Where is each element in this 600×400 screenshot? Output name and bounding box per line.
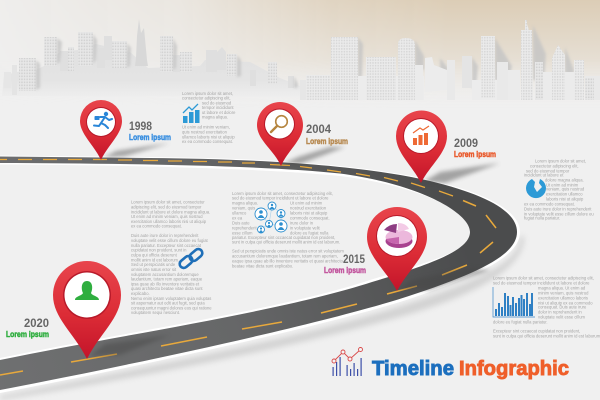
text block: left column: mollit anim id est laborum. [131, 258, 179, 262]
title: Infographic [459, 358, 569, 380]
text block: top: quis nostrud exercitation [182, 130, 228, 134]
text block: center: commodo consequat. [290, 216, 330, 220]
background [68, 0, 600, 84]
text block: center: sed do eiusmod tempor incididunt ut labore et dolore [232, 196, 329, 200]
text block: top: tempor incididunt [202, 105, 234, 110]
text block: right: Lorem ipsum dolor sit amet, [535, 158, 586, 164]
text block: left column: voluptatem sequi nesciunt. [131, 310, 180, 315]
icon: blue rising chart [183, 104, 200, 123]
text block: lower right: magna aliqua. Ut enim ad [538, 286, 586, 290]
text block: lower right: dolor in reprehenderit in [538, 310, 582, 314]
text block: center: irure dolor in [290, 220, 314, 226]
title [372, 358, 569, 380]
text block: center: eaque ipsa quae ab illo inventore veritatis et quasi architecto [232, 258, 344, 264]
text block: lower right: consequat. Duis aute irure [538, 304, 587, 310]
text block: center: magna aliqua. [232, 200, 258, 206]
skyline: left buildings [4, 19, 294, 95]
skyline: building shadows [36, 25, 574, 90]
icon: magnifier [271, 116, 287, 132]
bar chart [493, 287, 535, 317]
text block: top: ut labore et dolore [202, 110, 236, 115]
label: 2009 [454, 136, 496, 159]
text block: center: Duis aute [232, 220, 250, 226]
text block: top: Ut enim ad minim veniam, [182, 124, 230, 130]
text block: lower right: nisi ut aliquip ex ea commodo [538, 300, 593, 306]
skyline: left silhouette [2, 44, 300, 97]
label: 2009: 2009 [454, 136, 478, 150]
text block: center: reprehenderit [232, 226, 257, 230]
label: 2004: 2004 [306, 122, 331, 136]
text block: left column: adipiscing elit, sed do eiusmod tempor [131, 204, 202, 210]
text block: center: laboris nisi ut aliquip [290, 210, 328, 216]
label: 1998: Lorem ipsum [129, 132, 171, 142]
text block: lower right: exercitation ullamco laboris [538, 296, 588, 300]
label: 2015: Lorem ipsum [324, 265, 366, 275]
text block: center: nostrud exercitation [290, 206, 327, 210]
road: asphalt [0, 156, 517, 390]
text block: lower right: sed do eiusmod tempor incididunt ut labore et dolore [493, 280, 590, 286]
icon: orange bar chart [413, 126, 429, 145]
text block: lower right: Excepteur sint occaecat cupidatat non proident, [493, 328, 580, 334]
text block: right: veniam, quis nostrud [546, 186, 585, 192]
label: 2020: Lorem ipsum [6, 329, 49, 339]
icon: chain link [178, 247, 204, 270]
pin: 1998 [80, 100, 122, 160]
text block: center: dolore eu fugiat nulla [290, 230, 329, 236]
icon: purple pie [384, 223, 412, 248]
pin: 2020 [53, 261, 121, 359]
text block: top: Lorem ipsum dolor sit amet, [182, 91, 233, 96]
text block: top: sed do eiusmod [202, 100, 232, 106]
text block: center [232, 191, 344, 268]
text block: left column: ipsa quae ab illo inventore veritatis et [131, 282, 200, 286]
text block: left column: incididunt ut labore et dolore magna aliqua. [131, 210, 210, 214]
text block: lower right: Lorem ipsum dolor sit amet, consectetur adipiscing elit, [493, 276, 594, 280]
text block: left column: Lorem ipsum dolor sit amet, consectetur [131, 200, 205, 204]
text block: left column: Nemo enim ipsam voluptatem quia voluptas [131, 296, 211, 301]
title: Timeline [372, 358, 454, 380]
icon: blue pie [526, 179, 546, 198]
text block: left column: Sed ut perspiciatis unde [131, 262, 176, 267]
text block: left column: omnis iste natus error sit [131, 267, 177, 272]
text block: center: Ut enim ad minim [290, 200, 323, 206]
text block: top: ullamco laboris nisi ut aliquip [182, 134, 235, 140]
text block: center: ex ea [232, 216, 243, 220]
text block: left column: quasi architecto beatae vitae dicta sunt [131, 286, 203, 291]
road [0, 156, 520, 393]
label: 2020 [6, 316, 49, 339]
pin: 2004 [257, 102, 303, 166]
text block: right: consectetur adipiscing elit, [530, 164, 579, 168]
text block: lower right: dolore eu fugiat nulla pariatur. [493, 320, 548, 324]
icon: green person [75, 281, 99, 300]
text block: left column: culpa qui officia deserunt [131, 252, 178, 258]
label: 2009: Lorem ipsum [454, 149, 496, 159]
icon: runner [94, 112, 112, 128]
text block: left column: Duis aute irure dolor in reprehenderit [131, 233, 199, 238]
text block: right: laboris nisi ut aliquip [546, 196, 584, 202]
label: 2015 [324, 252, 366, 275]
text block: left column: exercitation ullamco laboris nisi ut aliquip [131, 219, 207, 224]
text block: left column: explicabo. [131, 291, 150, 296]
pin: 2015 [367, 207, 427, 291]
skyline: right tall buildings [306, 20, 594, 100]
text block: right: incididunt ut labore et [524, 172, 564, 178]
text block: right: exercitation ullamco [546, 192, 583, 196]
label: 1998: 1998 [129, 119, 152, 133]
text block: center: Sed ut perspiciatis unde omnis iste natus error sit voluptatem [232, 248, 344, 254]
pin shadows [90, 143, 500, 356]
text block: center: veniam, quis [232, 206, 255, 210]
text block: left column [131, 200, 212, 315]
text block: left column: sit aspernatur aut odit aut fugit, sed quia [131, 300, 205, 306]
text block: lower right: voluptate velit esse cillum [538, 314, 585, 320]
text block: top: consectetur adipiscing elit, [182, 96, 231, 100]
title icon: chart with line [332, 348, 362, 376]
road: white edge [0, 156, 520, 393]
road: center dashes [0, 160, 496, 375]
text block: top [182, 91, 236, 144]
city skyline [2, 19, 600, 100]
text block: top: magna aliqua. [202, 114, 228, 120]
text block: left column: voluptatem accusantium doloremque [131, 272, 199, 277]
text block: left column: voluptate velit esse cillum dolore eu fugiat [131, 238, 208, 243]
text block: left column: nulla pariatur. Excepteur sint occaecat [131, 243, 202, 248]
text block: center: esse cillum [232, 230, 253, 236]
text block: center: in voluptate velit [290, 226, 321, 230]
label: 2004 [306, 122, 348, 146]
text block: right: in voluptate velit esse cillum dolore eu [524, 212, 594, 216]
text block: left column: Ut enim ad minim veniam, quis nostrud [131, 214, 203, 219]
text block: top: ex ea commodo consequat. [182, 139, 233, 144]
text block: center: Lorem ipsum dolor sit amet, consectetur adipiscing elit, [232, 191, 333, 196]
text block: left column: ex ea commodo consequat. [131, 224, 182, 228]
label: 2020: 2020 [24, 316, 49, 330]
text block: lower right: sunt in culpa qui officia deserunt mollit anim id est laborum. [493, 334, 600, 338]
label: 2004: Lorem ipsum [306, 136, 348, 146]
text block: right [524, 158, 594, 220]
road shadow [0, 236, 524, 400]
text block: left column: laudantium, totam rem aperiam, eaque [131, 276, 203, 282]
text block: right: dolore magna aliqua. [545, 178, 584, 182]
text block: right: sed do eiusmod tempor [526, 168, 570, 174]
text block: lower right: minim veniam, quis nostrud [538, 290, 589, 296]
text block: center: ullamco [232, 210, 247, 216]
text block: center: sunt in culpa qui officia deserunt mollit anim id est laborum. [232, 240, 340, 244]
label: 2015: 2015 [343, 252, 365, 266]
text block: lower right [493, 276, 600, 338]
text block: right: fugiat nulla pariatur. [524, 216, 560, 220]
text block: left column: consequuntur magni dolores eos qui ratione [131, 306, 212, 310]
text block: right: Ut enim ad minim [546, 182, 579, 188]
text block: center: pariatur. Excepteur sint occaecat cupidatat non proident, [232, 235, 335, 240]
text block: right: Duis aute irure dolor in reprehenderit [524, 206, 592, 212]
label: 1998 [129, 119, 171, 142]
text block: left column: cupidatat non proident, sunt in [131, 248, 187, 252]
pin: 2009 [396, 111, 447, 183]
text block: center: beatae vitae dicta sunt explicabo. [232, 264, 293, 268]
text block: center: accusantium doloremque laudantium, totam rem aperiam, [232, 254, 338, 258]
text block: right: ex ea commodo consequat. [524, 202, 575, 206]
skyline: right low buildings [300, 56, 600, 100]
icon: people network [255, 202, 287, 233]
